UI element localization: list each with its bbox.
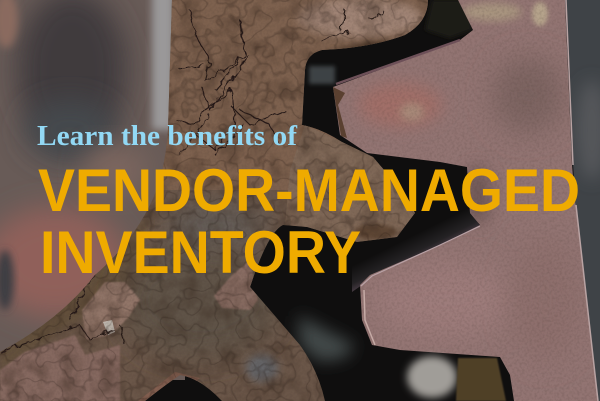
streak at top left — [0, 0, 18, 48]
lower lighter — [390, 273, 495, 327]
rusty centre gear — [0, 0, 430, 401]
background: grey highlight in gap — [309, 66, 335, 84]
dark blotch upper left — [17, 0, 127, 150]
dark shade at valley — [464, 165, 492, 225]
light band beside rust — [152, 0, 174, 130]
white fluff — [407, 356, 457, 398]
middle rust tooth — [285, 125, 415, 242]
pale top right patch — [532, 2, 548, 26]
title line 2: INVENTORY — [40, 219, 361, 286]
rose patch upper — [83, 145, 147, 195]
tooth tip rust — [333, 87, 347, 138]
olive band — [1, 227, 144, 365]
speckle — [330, 0, 600, 401]
salmon patch upper tooth — [362, 85, 438, 125]
blue-grey blotch — [25, 100, 115, 160]
dark streak — [0, 250, 14, 310]
bluish spot — [246, 354, 278, 382]
background: dark bevel of lower tooth — [352, 208, 480, 292]
mottled texture — [0, 0, 430, 401]
grey body — [134, 255, 276, 350]
pale upper patch — [462, 3, 522, 21]
blurred left gear — [0, 0, 185, 380]
background: lighter slate area — [576, 80, 600, 180]
grey centre — [176, 206, 258, 246]
lower flakes — [0, 335, 120, 401]
overline text: Learn the benefits of — [37, 120, 297, 152]
gear highlight edges — [336, 0, 598, 401]
brown patch under tooth — [456, 358, 506, 401]
pale chip — [103, 320, 115, 335]
centre flake chips — [82, 282, 140, 340]
flake right — [214, 260, 258, 310]
pale patch on upper tooth — [400, 103, 424, 121]
background: lit grey patch lower right — [298, 315, 355, 362]
crack network — [0, 0, 430, 401]
background: grey slate at right — [565, 0, 600, 401]
bottom chip — [138, 372, 200, 401]
pale tooth top — [298, 0, 422, 38]
lower right tone — [510, 240, 580, 360]
background: brown shadow above tooth — [425, 0, 472, 38]
cracks — [0, 10, 385, 352]
pink right gear with teeth — [330, 0, 600, 401]
fine pitting — [0, 0, 430, 401]
brown shade in tooth — [353, 224, 397, 240]
dark underside of top tooth — [333, 37, 392, 49]
warm upper tone — [160, 0, 430, 190]
dark shade middle — [492, 57, 564, 133]
rose patch — [0, 207, 127, 317]
